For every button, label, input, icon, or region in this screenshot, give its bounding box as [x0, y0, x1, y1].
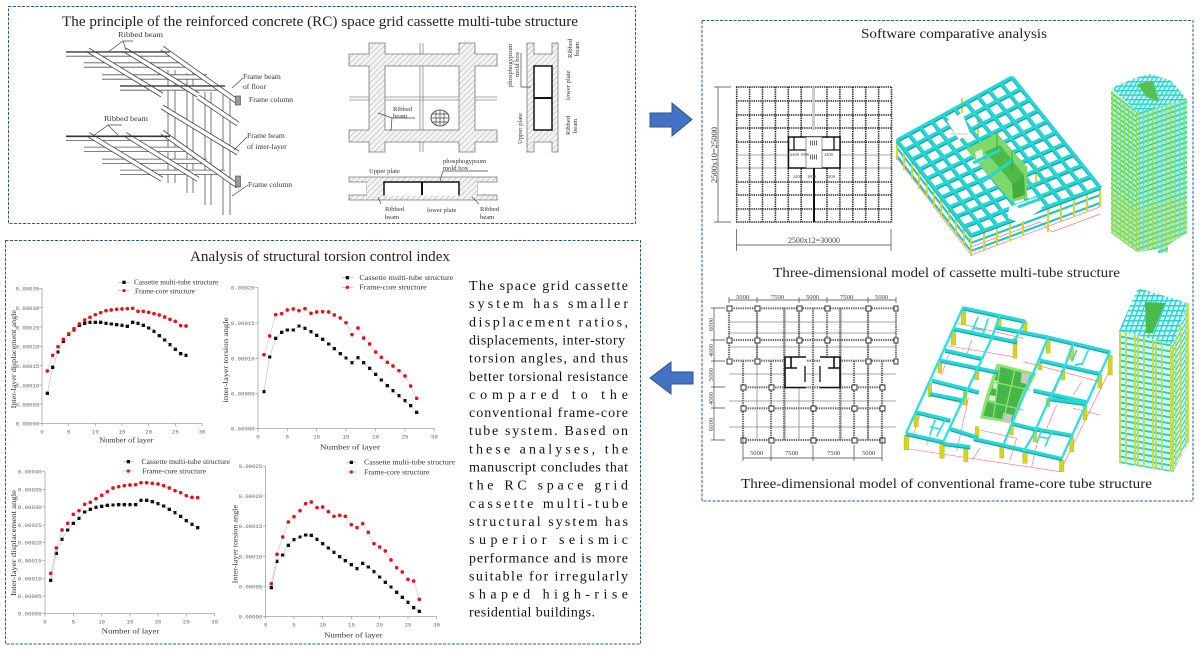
dimensions: left: 6000	[708, 417, 715, 431]
text block: conclusions: displacement ratios,	[469, 315, 628, 330]
text block: conclusions: The space grid cassette	[469, 279, 628, 294]
chart: inter-layer torsion angle (bottom right): 20	[376, 621, 384, 628]
dimensions: left	[708, 317, 715, 431]
diagram: horizontal section: lower plate	[427, 207, 457, 214]
chart: inter-layer displacement angle (top left): 30	[199, 428, 206, 435]
chart: inter-layer torsion angle (bottom right): 5	[292, 621, 296, 628]
label: Ribbed beam top: Ribbed beam	[118, 30, 163, 39]
diagram: horizontal section: beam	[385, 214, 400, 221]
caption: conventional model: Three-dimensional model of conventional frame-core tube structure	[741, 477, 1152, 492]
text block: conclusions: compared to the	[469, 388, 628, 403]
chart: inter-layer displacement angle (bottom left): 0.00000	[18, 611, 42, 618]
dimensions: top: 5000	[806, 294, 820, 301]
diagram: cassette plan view: Ribbed	[393, 106, 412, 113]
legend: Cassette multi-tube structure	[141, 457, 230, 466]
chart: inter-layer displacement angle (top left): 10	[92, 428, 99, 435]
chart: inter-layer displacement angle (bottom left): 10	[98, 618, 106, 625]
panel: principle of the RC space grid cassette multi-tube structure	[8, 6, 636, 224]
dimensions: bottom	[750, 450, 876, 457]
text block: conclusions: these analyses, the	[469, 442, 628, 457]
dimensions: bottom: 5000	[862, 450, 876, 457]
notch: front recess	[1008, 197, 1042, 223]
dimensions: top: 7500	[840, 294, 854, 301]
chart: inter-layer displacement angle (bottom left): 20	[155, 618, 162, 625]
3D model: cassette floors	[897, 77, 1100, 256]
diagram: vertical section: beam	[572, 118, 579, 133]
chart: inter-layer torsion angle (bottom right): 0.00000	[239, 613, 263, 620]
chart: inter-layer torsion angle (bottom right): 15	[348, 621, 355, 628]
chart: inter-layer displacement angle (top left): 0.00025	[16, 324, 40, 331]
diagram: isometric ribbed beam frame	[66, 30, 293, 215]
chart: inter-layer torsion angle (top right): Number of layer	[320, 442, 381, 451]
chart: inter-layer torsion angle (top right): 0.00015	[231, 320, 255, 327]
chart: inter-layer displacement angle (bottom left): 0.00040	[18, 469, 42, 476]
chart: inter-layer displacement angle (bottom left)	[9, 457, 230, 636]
chart: inter-layer displacement angle (top left): 15	[119, 428, 126, 435]
label: Frame beam of inter-layer: of inter-layer	[247, 142, 287, 151]
heading: software comparative analysis: Software comparative analysis	[861, 27, 1047, 42]
chart: inter-layer torsion angle (bottom right): 0	[264, 621, 268, 628]
heading: principle: The principle of the reinforced concrete (RC) space grid cassette multi-tube structure	[62, 14, 578, 30]
arrow: back to torsion analysis	[650, 362, 693, 394]
chart: inter-layer displacement angle (top left): 0	[40, 428, 44, 435]
dimensions: left: 6000	[708, 317, 715, 331]
diagram: vertical section	[507, 38, 581, 152]
legend: Frame-core structure	[142, 466, 206, 475]
text block: conclusions: better torsional resistance	[469, 370, 628, 385]
dimensions: top: 7500	[771, 294, 785, 301]
chart: inter-layer displacement angle (bottom left): 0.00015	[18, 557, 42, 564]
dimensions: bottom: 7500	[827, 450, 841, 457]
plan: conventional frame-core	[708, 294, 898, 461]
core: green shear walls	[966, 133, 1027, 202]
plan: cassette grid: 1800	[807, 174, 817, 179]
chart: inter-layer displacement angle (bottom left): 25	[183, 618, 190, 625]
chart: inter-layer displacement angle (top left): Number of layer	[99, 435, 154, 444]
legend: Cassette multi-tube structure	[134, 278, 218, 287]
legend	[346, 458, 455, 476]
chart: inter-layer displacement angle (bottom left): 5	[72, 618, 76, 625]
dimensions: bottom: 5000	[750, 450, 764, 457]
diagram: vertical section: Ribbed	[567, 39, 574, 58]
chart: inter-layer torsion angle (top right): 0	[256, 433, 260, 440]
chart: inter-layer torsion angle (top right): 0.00005	[231, 390, 255, 397]
arrow: to software analysis	[650, 103, 692, 136]
chart: inter-layer torsion angle (top right): 30	[431, 433, 438, 440]
chart: inter-layer displacement angle (bottom left): Number of layer	[102, 627, 160, 636]
label: Ribbed beam lower: Ribbed beam	[104, 114, 148, 123]
chart: inter-layer displacement angle (top left): 0.00035	[16, 286, 40, 293]
legend: Cassette multi-tube structure	[364, 458, 455, 467]
chart: inter-layer displacement angle (bottom left): 0.00035	[18, 486, 42, 493]
legend	[342, 273, 453, 292]
diagram: vertical section: phosphogypsum	[507, 44, 514, 87]
chart: inter-layer torsion angle (top right): 5	[286, 433, 290, 440]
text block: conclusions: shaped high-rise	[469, 588, 628, 603]
chart: inter-layer torsion angle (bottom right): 0.00025	[239, 463, 263, 470]
3D model: cassette tower	[1111, 74, 1187, 254]
3D model: conventional tower	[1119, 288, 1188, 472]
chart: inter-layer torsion angle (bottom right): 0.00020	[239, 493, 263, 500]
text block: conclusions: tube system. Based on	[469, 424, 628, 439]
3D model: conventional floors	[904, 307, 1112, 472]
diagram: cassette plan view	[349, 43, 497, 152]
chart: inter-layer displacement angle (top left): 20	[145, 428, 153, 435]
chart: inter-layer displacement angle (bottom left): 0.00025	[18, 522, 42, 529]
text block: conclusions: superior seismic	[469, 533, 628, 548]
chart: inter-layer displacement angle (top left): 0.00015	[16, 363, 40, 370]
core: green walls	[980, 363, 1037, 424]
chart: inter-layer torsion angle (bottom right): 0.00010	[239, 553, 263, 560]
text block: conclusions: performance and is more	[469, 551, 628, 566]
plan: cassette grid: 2400	[793, 174, 803, 179]
diagram: vertical section: Ribbed	[565, 116, 572, 135]
diagram: vertical section: lower plate	[565, 70, 572, 100]
text block: conclusions: the RC space grid	[469, 479, 628, 494]
chart: inter-layer torsion angle (top right)	[221, 273, 453, 451]
chart: inter-layer torsion angle (top right): 10	[313, 433, 321, 440]
chart: inter-layer torsion angle (bottom right): Inter-layer torsion angle	[231, 504, 240, 583]
chart: inter-layer displacement angle (top left): Inter-layer displacement angle	[9, 309, 18, 408]
chart: inter-layer displacement angle (top left): 0.00000	[16, 421, 40, 428]
dimension: plan height: 2500x10=25000	[710, 127, 719, 183]
chart: inter-layer torsion angle (bottom right): 30	[433, 621, 441, 628]
chart: inter-layer torsion angle (bottom right): 25	[405, 621, 412, 628]
text block: conclusions: structural system has	[469, 515, 628, 530]
panel: software comparative analysis	[702, 20, 1193, 501]
legend	[123, 457, 230, 475]
text block: conclusions	[469, 279, 628, 621]
plan: cassette grid: 2400	[824, 152, 834, 157]
chart: inter-layer torsion angle (top right): 0.00000	[231, 426, 255, 433]
text block: conclusions: displacements, inter-story	[469, 334, 625, 348]
plan: cassette grid: 2400 1800	[790, 152, 810, 157]
label: Frame beam of floor: Frame beam	[243, 72, 281, 81]
diagram: horizontal section	[349, 158, 500, 221]
plan: cassette grid	[710, 87, 892, 251]
panel: analysis of structural torsion control index	[6, 240, 640, 644]
chart: inter-layer torsion angle (top right): inter-layer torsion angle	[221, 317, 230, 403]
notch: upper left opening	[947, 113, 970, 140]
legend: Frame-core structure	[364, 467, 429, 476]
chart: inter-layer displacement angle (bottom left): 0	[43, 618, 47, 625]
legend: Frame-core structure	[135, 286, 195, 295]
chart: inter-layer torsion angle (top right): 15	[343, 433, 350, 440]
legend: Cassette multi-tube structure	[359, 273, 453, 282]
chart: inter-layer displacement angle (bottom left): Inter-layer displacement angle	[9, 489, 18, 596]
chart: inter-layer displacement angle (bottom left): 15	[127, 618, 134, 625]
chart: inter-layer displacement angle (bottom left): 0.00030	[18, 504, 42, 511]
chart: inter-layer torsion angle (top right): 0.00010	[231, 355, 255, 362]
diagram: vertical section: mold box	[514, 51, 521, 77]
text block: conclusions: cassette multi-tube	[469, 497, 628, 512]
text block: conclusions: torsion angles, and thus	[469, 352, 628, 367]
diagram: horizontal section: mold box	[443, 165, 469, 172]
chart: inter-layer torsion angle (bottom right)	[231, 458, 455, 640]
diagram: vertical section: beam	[574, 41, 581, 56]
chart: inter-layer torsion angle (top right): 0.00020	[231, 285, 255, 292]
diagram: horizontal section: phosphogypsum	[443, 158, 487, 165]
chart: inter-layer displacement angle (top left): 0.00020	[16, 344, 40, 351]
diagram: horizontal section: Ribbed	[385, 206, 404, 213]
text block: conclusions: suitable for irregularly	[469, 569, 628, 584]
chart: inter-layer displacement angle (bottom left): 0.00020	[18, 540, 42, 547]
diagram: horizontal section: beam	[480, 214, 495, 221]
text block: conclusions: manuscript concludes that	[469, 460, 628, 476]
diagram: vertical section: Upper plate	[517, 113, 524, 144]
text block: conclusions: residential buildings.	[469, 606, 595, 621]
chart: inter-layer torsion angle (bottom right): 10	[319, 621, 327, 628]
chart: inter-layer displacement angle (bottom left): 0.00010	[18, 575, 42, 582]
chart: inter-layer displacement angle (top left): 5	[67, 428, 71, 435]
caption: cassette model: Three-dimensional model of cassette multi-tube structure	[773, 266, 1120, 281]
dimension: plan width: 2500x12=30000	[788, 236, 840, 245]
dimensions: left: 4000	[708, 343, 715, 357]
chart: inter-layer displacement angle (top left): 0.00030	[16, 305, 40, 312]
legend	[118, 278, 218, 295]
heading: torsion analysis: Analysis of structural torsion control index	[190, 249, 450, 265]
chart: inter-layer displacement angle (top left): 0.00005	[16, 401, 40, 408]
chart: inter-layer torsion angle (bottom right): 0.00015	[239, 523, 263, 530]
dimensions: top: 5000	[736, 294, 750, 301]
chart: inter-layer displacement angle (top left): 0.00010	[16, 382, 40, 389]
chart: inter-layer displacement angle (bottom left): 0.00005	[18, 593, 42, 600]
diagram: horizontal section: Ribbed	[480, 206, 499, 213]
legend: Frame-core structure	[359, 283, 427, 292]
chart: inter-layer displacement angle (top left)	[9, 278, 218, 444]
text block: conclusions: conventional frame-core	[469, 406, 628, 421]
chart: inter-layer torsion angle (bottom right): Number of layer	[324, 631, 383, 640]
chart: inter-layer torsion angle (bottom right): 0.00005	[239, 583, 263, 590]
chart: inter-layer displacement angle (bottom left): 30	[211, 618, 219, 625]
diagram: cassette plan view: beam	[393, 113, 408, 120]
dimensions: left: 5000	[708, 367, 715, 381]
chart: inter-layer torsion angle (top right): 25	[402, 433, 409, 440]
text block: conclusions: system has smaller	[469, 297, 628, 312]
dimensions: top	[736, 294, 889, 301]
label: Frame column lower: Frame column	[248, 180, 292, 189]
chart: inter-layer displacement angle (top left): 25	[172, 428, 179, 435]
chart: inter-layer torsion angle (top right): 20	[372, 433, 380, 440]
label: Frame beam of inter-layer: Frame beam	[247, 131, 285, 140]
label: Frame column upper: Frame column	[249, 95, 293, 104]
label: Frame beam of floor: of floor	[243, 82, 266, 91]
plan: cassette grid: 2400	[826, 174, 836, 179]
diagram: horizontal section: Upper plate	[369, 168, 400, 175]
dimensions: top: 5000	[875, 294, 889, 301]
dimensions: left: 4000	[708, 391, 715, 405]
dimensions: bottom: 7500	[785, 450, 799, 457]
